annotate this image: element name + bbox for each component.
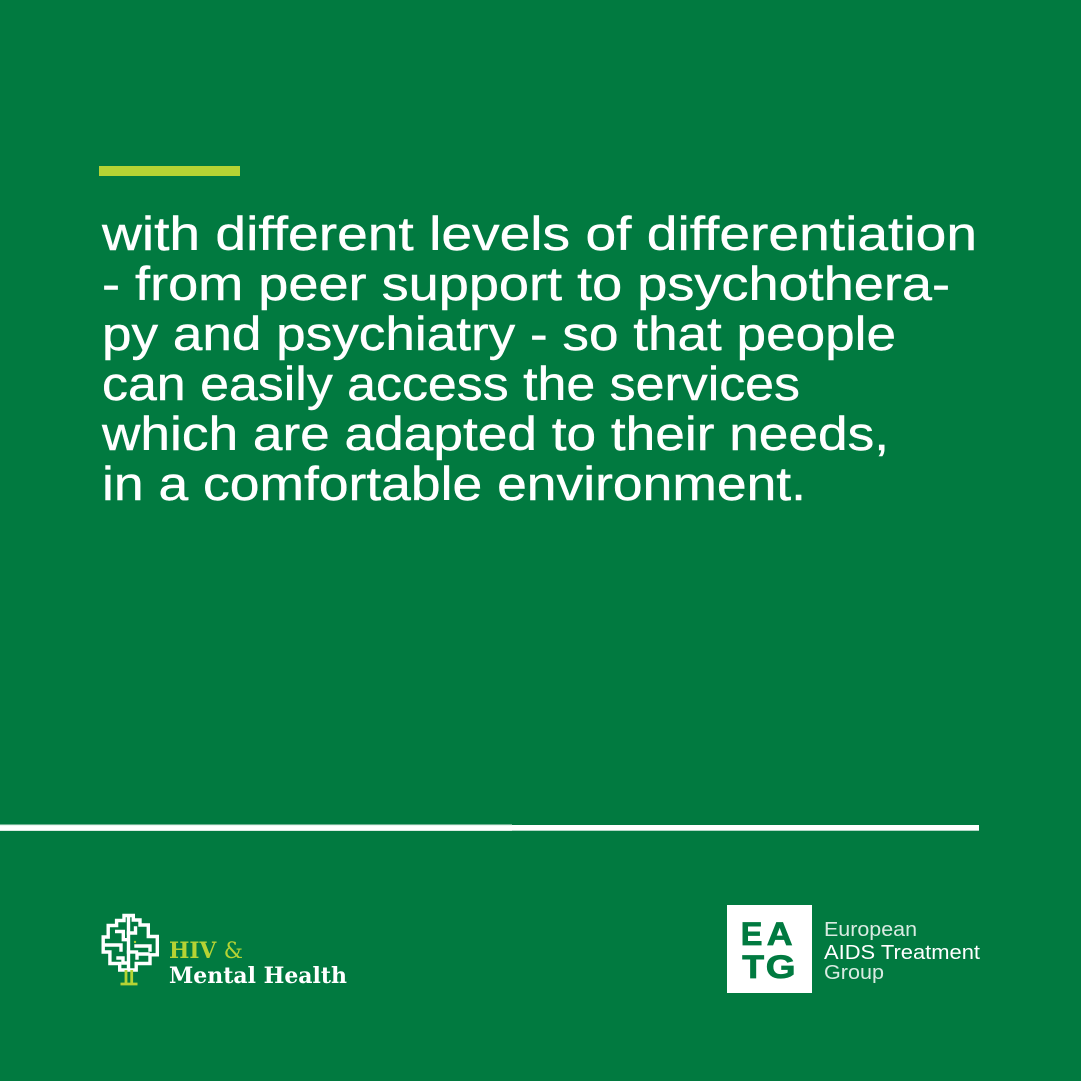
logo letters: E: [741, 916, 762, 952]
main text block: py and psychiatry - so that people: [102, 307, 896, 360]
logo text: Mental Health: Mental Health: [169, 963, 347, 989]
main text block: in a comfortable environment.: [102, 457, 806, 510]
main text block: - from peer support to psychothera-: [102, 257, 950, 310]
logo text: HIV &: HIV &: [169, 938, 243, 964]
organisation name: Group: [824, 962, 884, 984]
organisation name: AIDS Treatment: [824, 942, 980, 964]
organisation name: [824, 919, 980, 984]
logo letters: A: [767, 916, 793, 953]
icon: tree trunk: [120, 970, 138, 984]
logo box: [727, 905, 812, 993]
accent bar: [99, 166, 240, 176]
logo: EATG: [727, 905, 980, 993]
logo letters: T: [742, 949, 764, 986]
logo: HIV & Mental Health: [103, 916, 347, 989]
main text block: can easily access the services: [102, 357, 800, 410]
main text block: [101, 207, 977, 510]
icon: tree dot: [134, 941, 136, 943]
main text block: with different levels of differentiation: [101, 207, 977, 260]
divider line: [0, 824, 979, 831]
icon: brain tree: [103, 916, 157, 970]
logo letters: [741, 916, 796, 986]
logo letters: G: [766, 949, 796, 985]
organisation name: European: [824, 919, 917, 941]
main text block: which are adapted to their needs,: [101, 407, 889, 460]
